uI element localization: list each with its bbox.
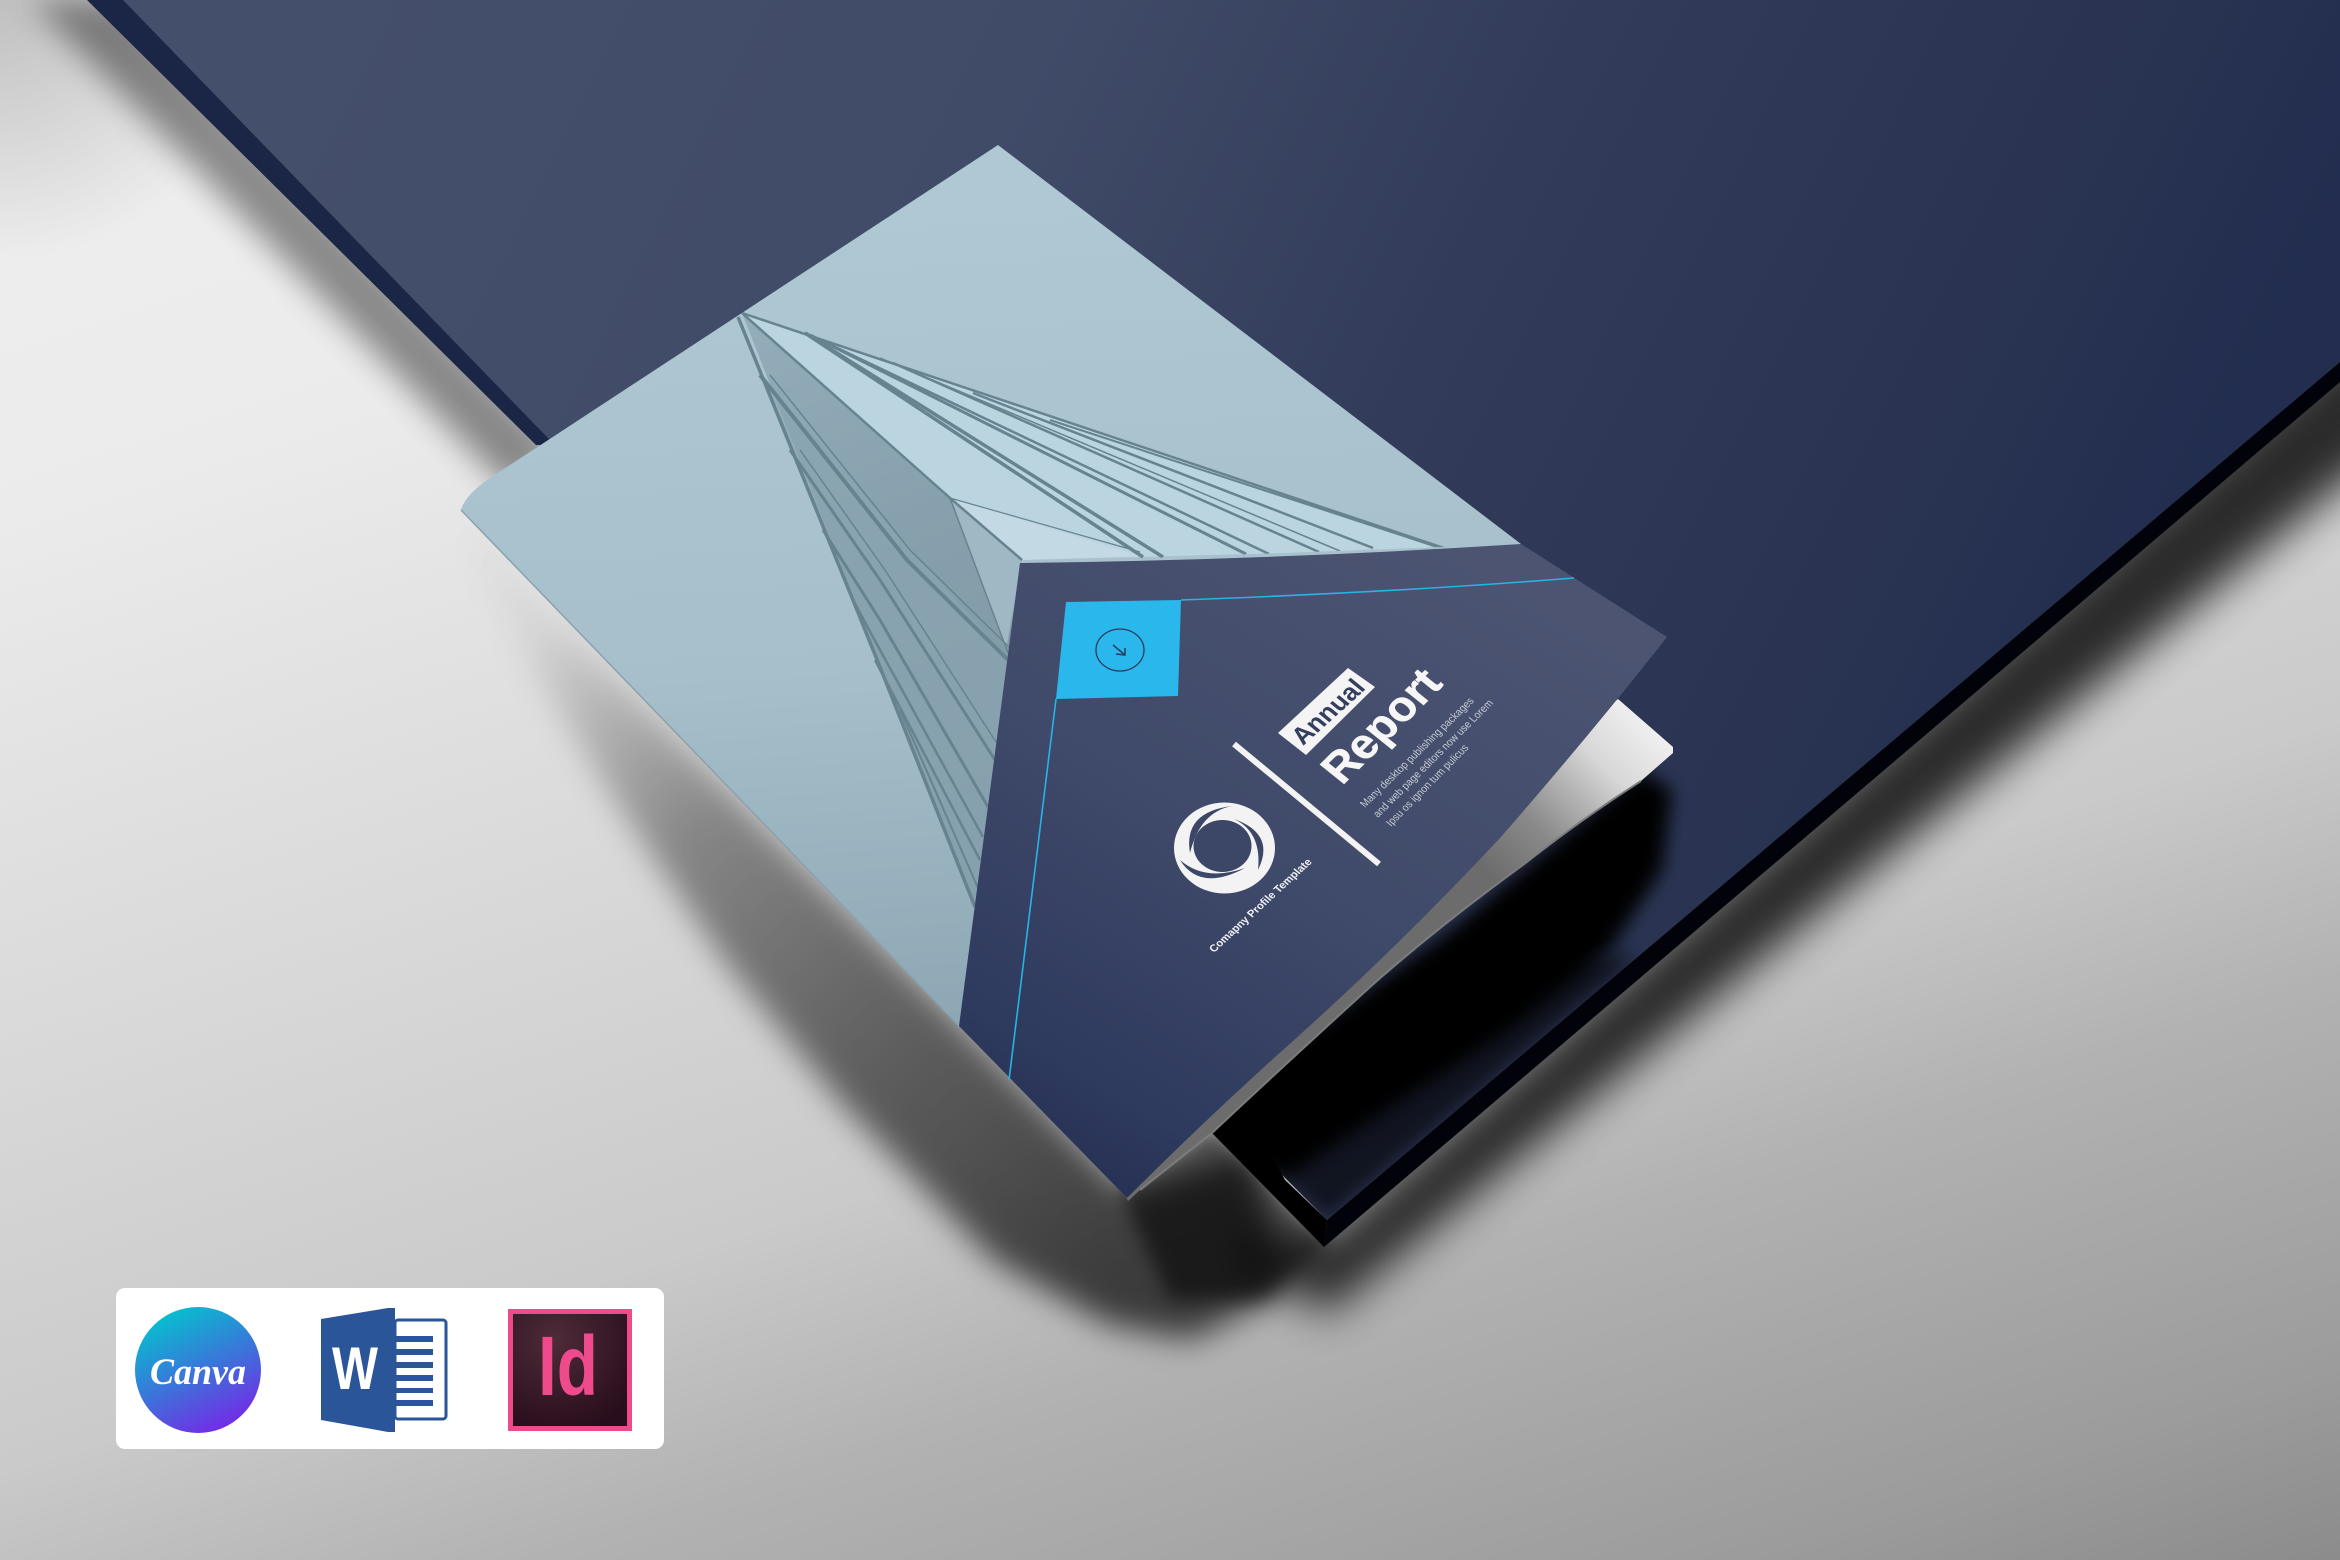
- front cover flap: [959, 544, 1667, 1198]
- board cast shadow: [1230, 200, 2340, 1315]
- description text: and web page editors now use Lorem: [1371, 698, 1496, 820]
- brochure cast shadow: [470, 530, 1290, 1340]
- logo: swirl: [1174, 802, 1275, 894]
- board right side edge: [1324, 362, 2340, 1247]
- building left face: [742, 313, 1022, 907]
- description text: Many desktop publishing packages: [1358, 695, 1477, 810]
- icon: InDesign: [510, 1312, 630, 1428]
- back page sky: [461, 145, 1521, 1198]
- icon: Word: [321, 1308, 446, 1432]
- navy board: [87, 0, 2340, 1247]
- building stripes: [738, 313, 1447, 907]
- cyan rule top: [1181, 578, 1574, 600]
- building pale facet: [950, 498, 1140, 560]
- report heading: Report: [1310, 659, 1452, 792]
- icon: InDesign: Id: [538, 1319, 598, 1413]
- board face: [123, 0, 2340, 1220]
- annual label: Annual: [1284, 673, 1371, 750]
- icon: Word: W: [332, 1335, 378, 1402]
- board top edge shadow: [30, 0, 570, 490]
- company profile caption: Comapny Profile Template: [1207, 857, 1315, 955]
- building right face: [742, 313, 1447, 560]
- cyan square: [1056, 600, 1181, 699]
- brochure shadow on board: [1243, 768, 1682, 1220]
- building left panel band: [770, 391, 992, 901]
- description text: Ipsu os ignon tum pulicus: [1384, 742, 1472, 829]
- icon: Canva: [135, 1307, 261, 1433]
- software badge: [116, 1288, 664, 1449]
- building corner facet: [950, 498, 1022, 650]
- building photo: [738, 313, 1447, 907]
- page block edge line: [1140, 781, 1641, 1190]
- spine edge: [461, 510, 959, 1026]
- dark gap shadow under brochure: [1120, 1125, 1330, 1300]
- icon: arrow in circle: [1096, 629, 1144, 671]
- deep shadow at board corner: [1212, 1100, 1327, 1247]
- cyan rule left: [1009, 699, 1056, 1080]
- divider line: [1234, 744, 1379, 864]
- icon: Canva: Canva: [150, 1352, 246, 1393]
- inner pages: [1100, 699, 1673, 1201]
- board upper side edge: [87, 0, 570, 445]
- brochure: [461, 145, 1673, 1201]
